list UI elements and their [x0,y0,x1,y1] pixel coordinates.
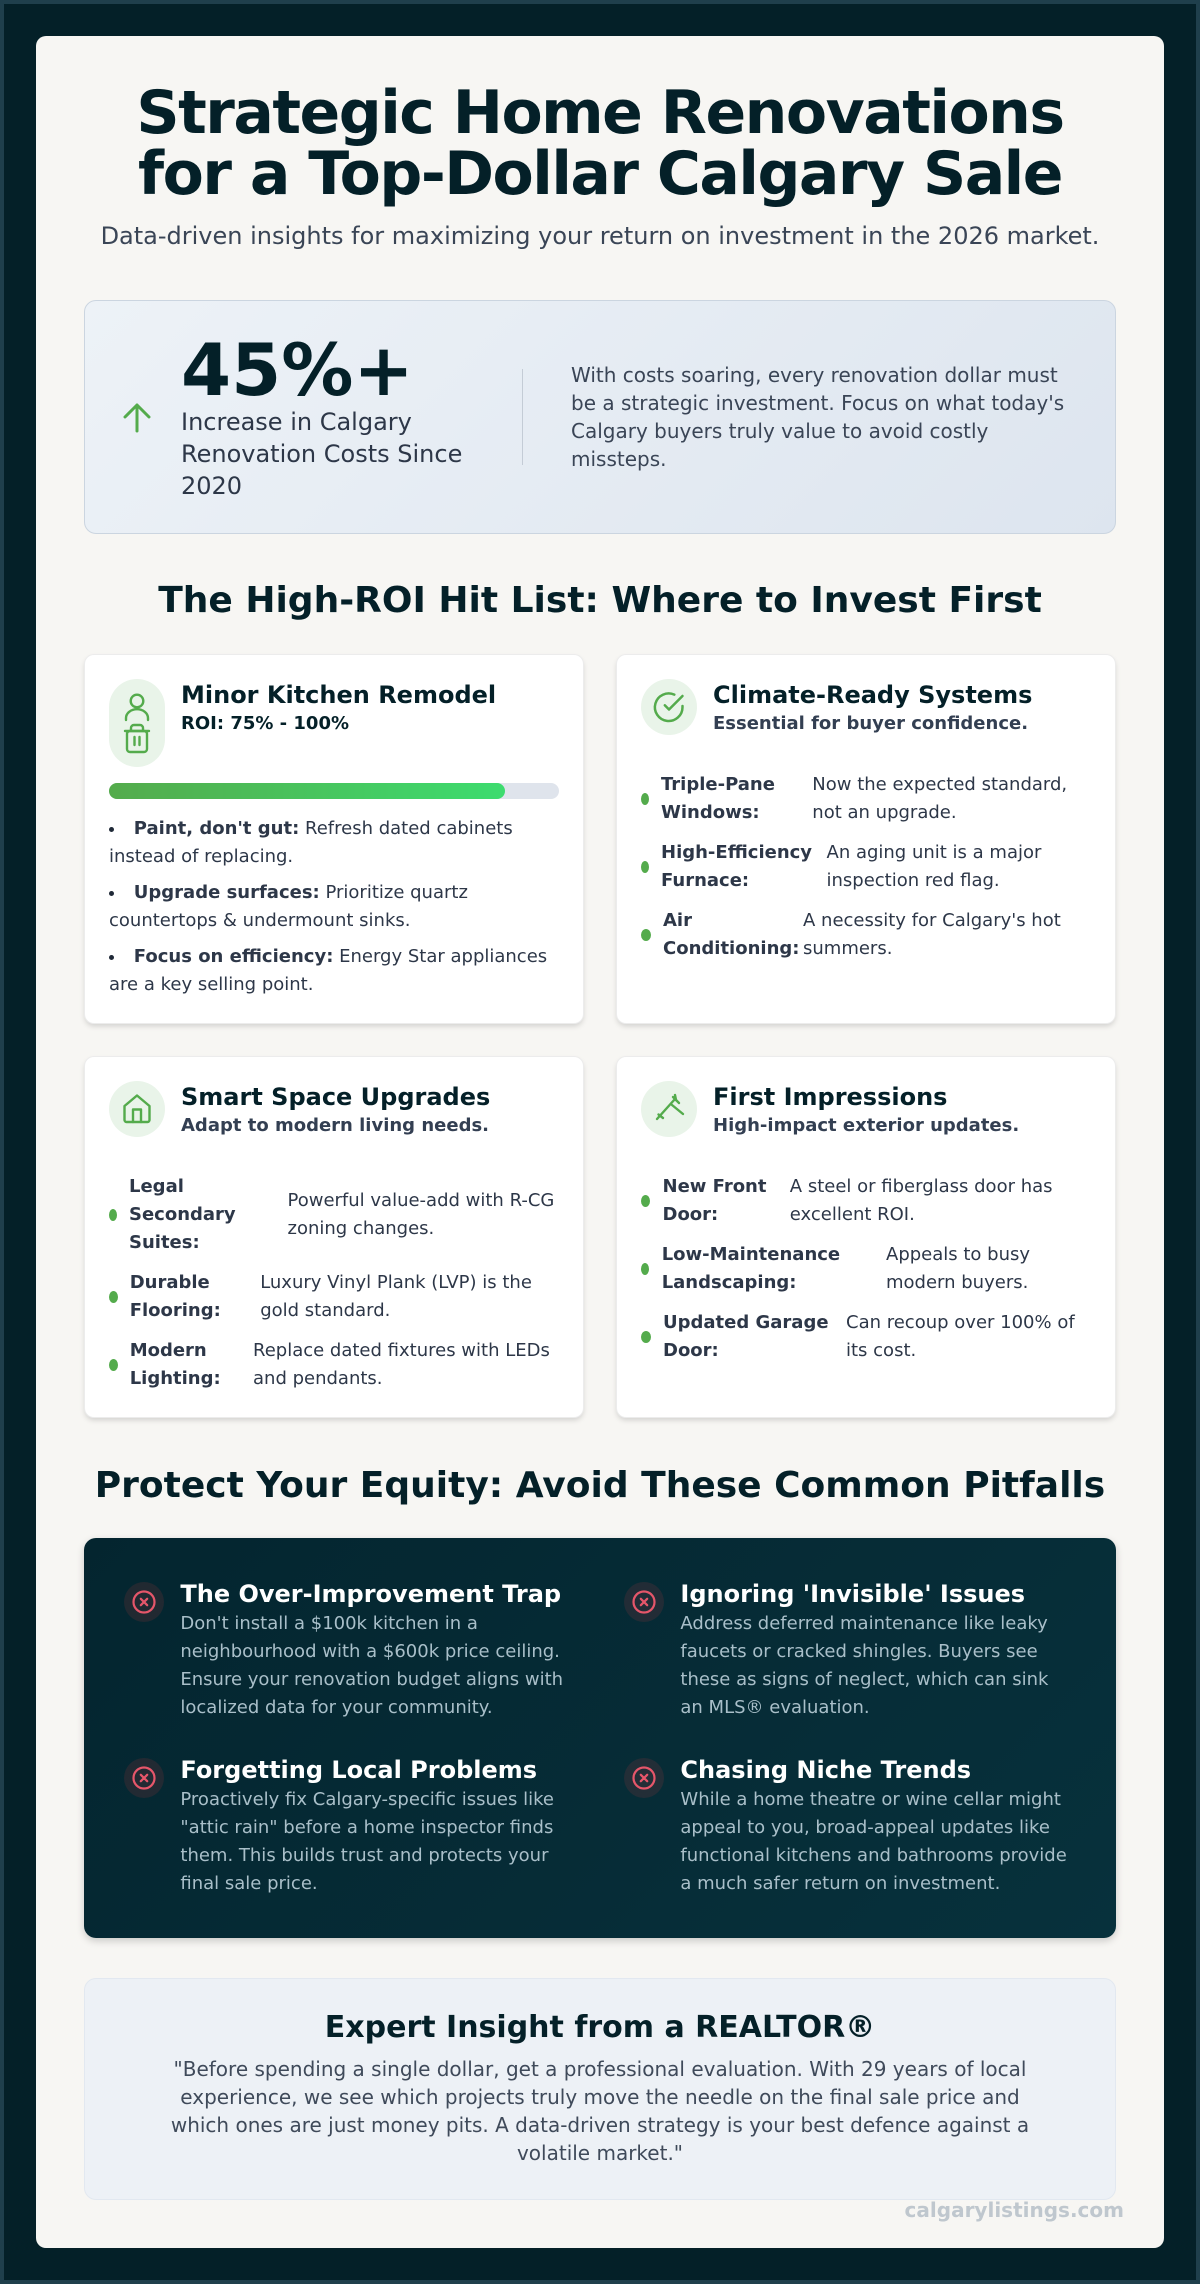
statistic description: Calgary buyers truly value to avoid costly [571,419,988,443]
item label [663,1312,829,1361]
item label: Legal [129,1176,184,1197]
statistic label: Increase in Calgary [181,408,412,436]
pitfall text: Ensure your renovation budget aligns with [180,1669,563,1690]
card subtitle: High-impact exterior updates. [713,1115,1019,1136]
card subtitle: Essential for buyer confidence. [713,713,1028,734]
item label: Door: [662,1204,718,1225]
item label [661,774,775,823]
pitfall text: Address deferred maintenance like leaky [680,1613,1048,1634]
icon: roof tools [641,1081,697,1137]
pitfall text: appeal to you, broad-appeal updates like [680,1817,1050,1838]
item bullet [641,1195,650,1207]
panel: expert insight [84,1978,1116,2200]
card title: Climate-Ready Systems [713,681,1032,709]
item label [130,1272,221,1321]
item label [662,1244,840,1293]
bullet: efficiency: Focus on efficiency: Energy Star appliances [134,946,547,967]
icon: check circle [641,679,697,735]
card title: Minor Kitchen Remodel [181,681,496,709]
item label: Suites: [129,1232,200,1253]
item bullet [109,1359,118,1371]
pitfall text: "attic rain" before a home inspector finds [180,1817,553,1838]
item text [886,1244,1030,1293]
bullet: paint: Paint, don't gut: Refresh dated cabinets [134,818,513,839]
item text: inspection red flag. [826,870,1000,891]
card subtitle: Adapt to modern living needs. [181,1115,489,1136]
item label: Modern [130,1340,207,1361]
bullet: surfaces [109,882,468,931]
pitfall text: functional kitchens and bathrooms provide [680,1845,1067,1866]
pitfall text: these as signs of neglect, which can sink [680,1669,1048,1690]
item label [130,1340,221,1389]
icon: home [109,1081,165,1137]
item label: Air [663,910,692,931]
icon: x circle [124,1758,164,1798]
icon: person and bin [109,679,165,767]
bullet: paint [109,818,513,867]
expert quote: volatile market." [517,2141,683,2165]
expert quote: experience, we see which projects truly move the needle on the final sale price and [180,2085,1020,2109]
item text [812,774,1067,823]
item text: An aging unit is a major [826,842,1041,863]
expert quote: "Before spending a single dollar, get a professional evaluation. With 29 years of local [174,2057,1026,2081]
item text [288,1190,554,1239]
statistic description: be a strategic investment. Focus on what today's [571,391,1064,415]
item text: zoning changes. [288,1218,434,1239]
pitfall text: final sale price. [180,1873,318,1894]
statistic label [181,408,462,500]
icon: x circle [624,1758,664,1798]
subtitle: Data-driven insights for maximizing your return on investment in the 2026 market. [101,222,1099,250]
item label [129,1176,236,1253]
divider [522,369,523,465]
icon: up arrow [123,403,151,432]
title [136,78,1064,208]
statistic label: 2020 [181,472,242,500]
pitfall text [680,1613,1048,1718]
panel: minor kitchen remodel [85,655,583,1023]
item label: Windows: [661,802,760,823]
item label [663,910,799,959]
pitfall text: faucets or cracked shingles. Buyers see [680,1641,1038,1662]
item label: New Front [662,1176,766,1197]
item label: Flooring: [130,1300,221,1321]
item text [826,842,1042,891]
statistic description: With costs soaring, every renovation dollar must [571,363,1058,387]
pitfall text: a much safer return on investment. [680,1873,1000,1894]
expert quote [171,2057,1029,2165]
item bullet [109,1291,118,1303]
item bullet [641,929,651,941]
item text: and pendants. [253,1368,383,1389]
pitfall title: The Over-Improvement Trap [180,1580,561,1608]
bullet: surfaces: Upgrade surfaces: Prioritize quartz [134,882,468,903]
pitfall text [180,1789,554,1894]
card title: First Impressions [713,1083,947,1111]
item text: summers. [803,938,892,959]
item bullet [109,1209,117,1221]
pitfall text [180,1613,563,1718]
icon: x circle [124,1582,164,1622]
expert quote: which ones are just money pits. A data-driven strategy is your best defence against a [171,2113,1029,2137]
heading: hit list: The High-ROI Hit List: Where to Invest First [158,580,1042,621]
watermark: calgarylistings.com [905,2198,1124,2222]
bullet: surfaces: countertops & undermount sinks. [109,910,410,931]
pitfall title: Forgetting Local Problems [180,1756,537,1784]
pitfall text: Don't install a $100k kitchen in a [180,1613,478,1634]
item label: Secondary [129,1204,236,1225]
pitfall text: them. This builds trust and protects your [180,1845,548,1866]
item label: Updated Garage [663,1312,829,1333]
item text: Luxury Vinyl Plank (LVP) is the [260,1272,532,1293]
progress fill [109,783,505,799]
panel: first impressions [617,1057,1115,1417]
item text [253,1340,550,1389]
pitfall text [680,1789,1067,1894]
item label: Landscaping: [662,1272,796,1293]
pitfall title: Ignoring 'Invisible' Issues [680,1580,1025,1608]
bullet: efficiency: are a key selling point. [109,974,313,995]
icon: x circle [624,1582,664,1622]
item text: Can recoup over 100% of [846,1312,1075,1333]
pitfall text: neighbourhood with a $600k price ceiling. [180,1641,560,1662]
heading: pitfalls: Protect Your Equity: Avoid These Common Pitfalls [95,1465,1105,1506]
bullet list [109,818,547,995]
bullet: efficiency [109,946,547,995]
progress bar [109,783,559,799]
statistic value: 45%+ [181,328,414,412]
item text: Powerful value-add with R-CG [288,1190,554,1211]
item text: A necessity for Calgary's hot [803,910,1061,931]
item text: not an upgrade. [812,802,957,823]
item bullet [641,861,649,873]
panel: climate-ready systems [617,655,1115,1023]
item bullet [641,1263,649,1275]
item text: excellent ROI. [790,1204,915,1225]
item text: Replace dated fixtures with LEDs [253,1340,550,1361]
pitfall text: While a home theatre or wine cellar might [680,1789,1061,1810]
item text [790,1176,1053,1225]
item label: High-Efficiency [661,842,812,863]
item label: Furnace: [661,870,749,891]
panel: pitfalls [84,1538,1116,1938]
item label: Low-Maintenance [662,1244,840,1265]
item bullet [641,793,649,805]
pitfall text: Proactively fix Calgary-specific issues like [180,1789,554,1810]
bullet: paint: instead of replacing. [109,846,293,867]
pitfall text: localized data for your community. [180,1697,493,1718]
item text [260,1272,532,1321]
item label: Durable [130,1272,210,1293]
item label: Conditioning: [663,938,799,959]
card ROI: ROI: 75% - 100% [181,713,349,734]
statistic label: Renovation Costs Since [181,440,462,468]
item text: Appeals to busy [886,1244,1030,1265]
item label: Lighting: [130,1368,221,1389]
title: Strategic Home Renovations [136,78,1064,148]
item text [803,910,1061,959]
expert heading: Expert Insight from a REALTOR® [325,2010,875,2045]
item text [846,1312,1076,1361]
statistic description [571,363,1064,471]
panel: smart space upgrades [85,1057,583,1417]
item text: gold standard. [260,1300,390,1321]
item label [662,1176,766,1225]
item label: Triple-Pane [661,774,775,795]
item label [661,842,812,891]
title: for a Top-Dollar Calgary Sale [138,138,1062,208]
item text: A steel or fiberglass door has [790,1176,1053,1197]
card title: Smart Space Upgrades [181,1083,490,1111]
panel: cost statistic [84,300,1116,534]
item bullet [641,1331,651,1343]
item text: its cost. [846,1340,916,1361]
item text: Now the expected standard, [812,774,1067,795]
item text: modern buyers. [886,1272,1028,1293]
item label: Door: [663,1340,719,1361]
statistic description: missteps. [571,447,666,471]
pitfall title: Chasing Niche Trends [680,1756,971,1784]
pitfall text: an MLS® evaluation. [680,1697,870,1718]
